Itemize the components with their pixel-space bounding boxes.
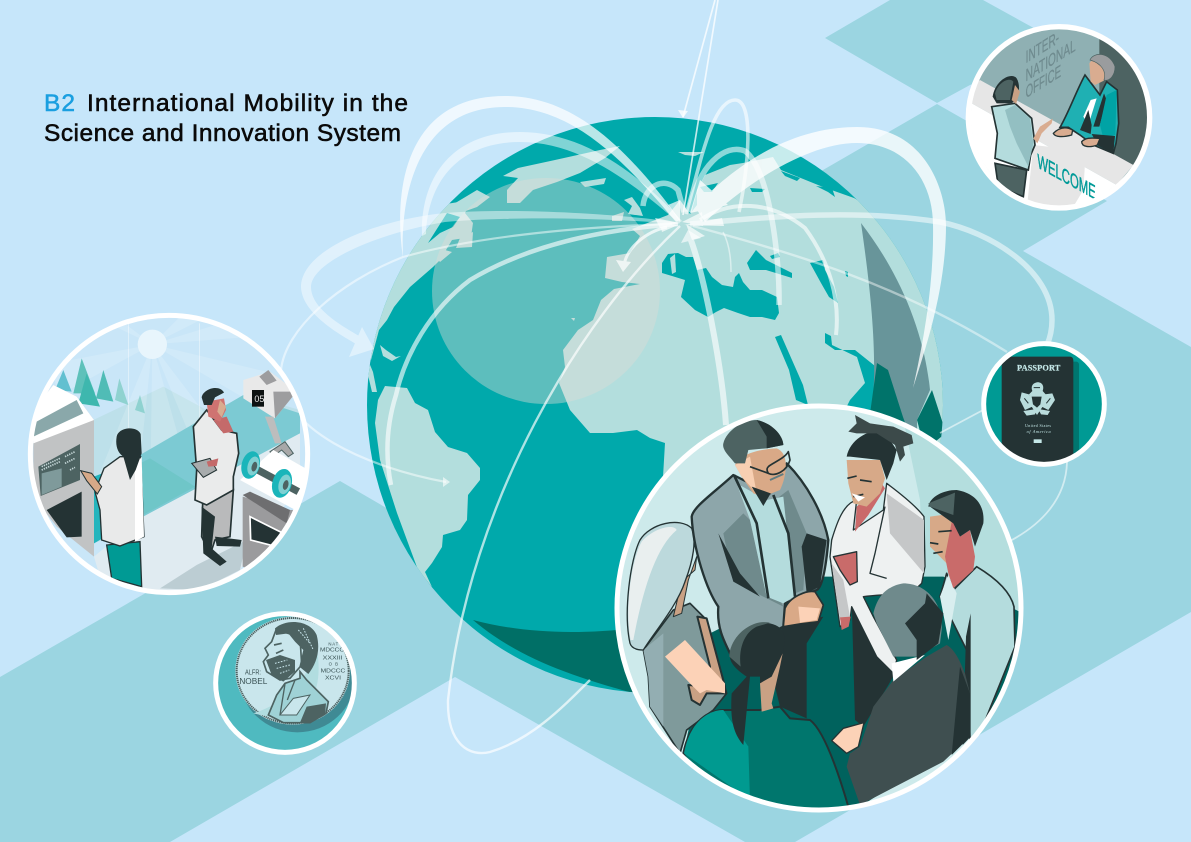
passport title: PASSPORT bbox=[1017, 364, 1061, 373]
wall text: OFFICE bbox=[1026, 62, 1061, 103]
arc: thick right with arrow bbox=[690, 127, 946, 388]
arc: thin inner bbox=[723, 232, 731, 272]
woman scientist bbox=[107, 542, 142, 587]
passport country line 2: of America bbox=[1027, 429, 1051, 434]
sun rays bbox=[100, 382, 238, 474]
title line 1: International Mobility in the bbox=[87, 90, 408, 117]
clerk bbox=[1060, 75, 1119, 153]
glass wall bbox=[140, 395, 300, 518]
man with glasses bbox=[692, 463, 828, 653]
arc: long loop through Africa bbox=[448, 226, 680, 753]
mobility arcs bbox=[281, 0, 1067, 753]
trees bbox=[55, 358, 145, 413]
wall text: NATIONAL bbox=[1026, 36, 1076, 86]
arrowhead: top bbox=[678, 110, 688, 118]
scene: passport bbox=[981, 341, 1107, 467]
wall text bbox=[1026, 34, 1076, 97]
border bbox=[968, 27, 1150, 208]
sun highlight on the globe bbox=[432, 178, 660, 404]
arc: eastward to passport bbox=[690, 215, 1052, 345]
medal inscription: XCVI bbox=[325, 675, 342, 681]
arc: top-left second bbox=[422, 132, 682, 236]
arc: Atlantic bbox=[387, 224, 678, 485]
arc: short to Spain with arrow bbox=[616, 227, 667, 272]
biometric symbol bbox=[1034, 439, 1042, 443]
arc: passport to circle bbox=[940, 409, 1067, 541]
arrowhead: South America bbox=[443, 477, 450, 487]
woman in lab coat bbox=[852, 600, 897, 727]
man on right bbox=[940, 567, 1015, 740]
title line 2: Science and Innovation System bbox=[44, 120, 401, 147]
arc: tall loop bbox=[686, 100, 748, 214]
medal inscription: XXXIII bbox=[323, 655, 343, 661]
globe shadow bbox=[473, 223, 946, 700]
medal inscription: OB bbox=[329, 661, 338, 666]
scene: team bbox=[610, 400, 1030, 833]
woman from behind bbox=[683, 707, 848, 833]
wall text: INTER- bbox=[1026, 28, 1059, 68]
arc: top-left thick bbox=[400, 96, 680, 258]
mountains bbox=[93, 387, 300, 543]
left machine bbox=[33, 385, 94, 557]
scene: medal bbox=[213, 611, 357, 755]
machine display bbox=[252, 390, 264, 407]
arc: straight thin upward bbox=[683, 0, 718, 215]
scene: lab bbox=[20, 310, 320, 600]
glass panel lines bbox=[128, 324, 200, 428]
seas on the land bbox=[428, 171, 880, 410]
arc: from the south with arrow bbox=[681, 230, 726, 425]
medal inscription: MDCCC bbox=[321, 668, 345, 674]
border bbox=[617, 406, 1021, 810]
floor bbox=[683, 577, 1023, 813]
arc: loop to the left with arrow bbox=[301, 211, 675, 357]
arc: loop to the middle east bbox=[689, 149, 779, 305]
passport country: United States bbox=[1025, 423, 1051, 428]
man scientist bbox=[202, 490, 233, 550]
man in dark jacket bbox=[847, 645, 970, 805]
circle: international team bbox=[610, 400, 1030, 833]
medal inscription bbox=[239, 641, 345, 686]
medal inscription: ALFR: bbox=[245, 668, 261, 677]
continents bbox=[368, 146, 943, 587]
arc: curve to the Gulf bbox=[700, 206, 837, 335]
scene: office desk bbox=[966, 24, 1152, 211]
woman in grey, left bbox=[643, 603, 727, 753]
section code: B2 bbox=[44, 90, 75, 117]
globe bbox=[360, 117, 960, 700]
medal inscription: MDCCC bbox=[320, 647, 344, 653]
welcome text: WELCOME bbox=[1037, 150, 1096, 204]
robot arm bbox=[265, 417, 282, 443]
medal inscription: NOBEL bbox=[239, 676, 267, 686]
floor bbox=[94, 433, 300, 600]
circle: international office bbox=[966, 24, 1152, 211]
ceiling light bbox=[242, 323, 320, 410]
visitor bbox=[995, 163, 1027, 197]
right machine bbox=[242, 496, 293, 568]
border bbox=[984, 344, 1104, 464]
border bbox=[216, 614, 354, 752]
ocean bbox=[367, 117, 943, 693]
circle: passport bbox=[981, 341, 1107, 467]
handshake bbox=[783, 591, 823, 627]
sun bbox=[138, 330, 167, 359]
arc: thin westward to South America bbox=[281, 224, 672, 482]
eagle emblem bbox=[1020, 382, 1055, 416]
title bbox=[44, 90, 408, 147]
bust of Nobel bbox=[263, 622, 328, 723]
circle: nobel medal bbox=[213, 611, 357, 755]
arc: loop above Britain bbox=[643, 183, 684, 212]
dumbbell part bbox=[240, 450, 304, 509]
arrowheads at the hub bbox=[655, 200, 724, 240]
scene: lab: 05 bbox=[254, 394, 264, 404]
arc: thin east bbox=[693, 226, 1007, 352]
medal inscription: NAT bbox=[328, 641, 339, 646]
border bbox=[30, 315, 308, 593]
circle: research laboratory bbox=[20, 310, 320, 600]
